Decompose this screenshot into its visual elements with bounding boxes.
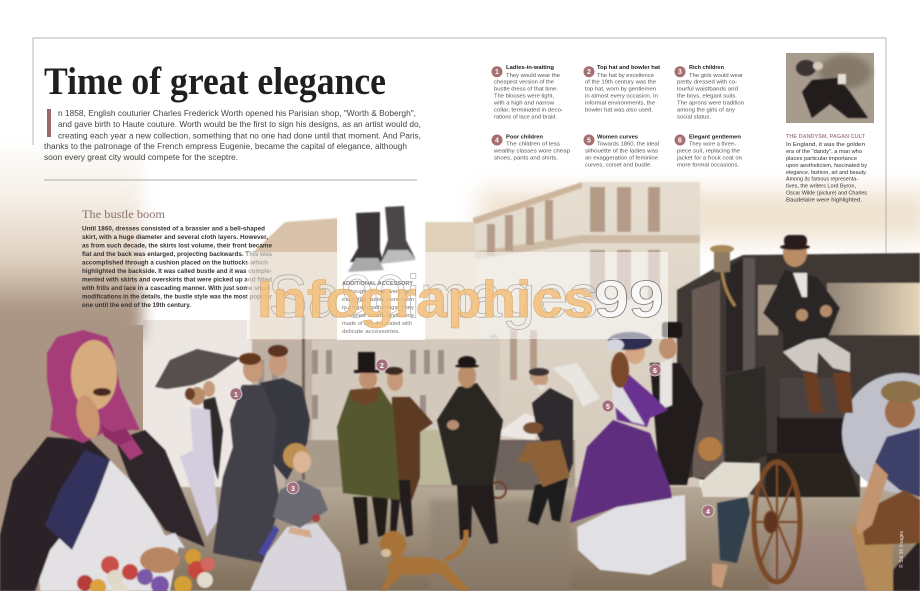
- legend item 3: rich children: The girls would wear: [689, 73, 743, 79]
- sidebar: the dandyism: tives, the writers Lord Byron,: [786, 184, 856, 190]
- legend item 3: rich children: among the girls of any: [677, 107, 735, 113]
- dog: [380, 530, 470, 591]
- legend item 1: ladies-in-waiting: They would wear the: [506, 73, 560, 79]
- legend item 5: women curves: Women curves: [597, 135, 638, 141]
- translucent watermark band: [247, 252, 668, 339]
- number badges on the illustration: 5: [606, 404, 610, 411]
- number badges on the illustration: 6: [653, 368, 657, 375]
- legend item 1: ladies-in-waiting: [492, 65, 563, 121]
- sidebar: the dandyism: Oscar Wilde (picture) and Charles: [786, 190, 867, 196]
- text block: the bustle boom: modifications in the details, the bustle style was the most popular: [82, 294, 273, 300]
- watermark: 99: [594, 271, 664, 329]
- legend item 3: rich children: Rich children: [689, 65, 724, 71]
- text block: the bustle boom: as from such decade, the skirts lost volume, their front became: [82, 244, 273, 250]
- legend item 4: poor children: wealthy classes wore cheap: [493, 148, 570, 154]
- legend item 6: elegant gentlemen: They wore a three-: [689, 141, 736, 147]
- legend item 2: top hat and bowler hat: informal environments, the: [585, 100, 655, 106]
- legend item 3: rich children: lourful waistbands and: [677, 86, 738, 92]
- accessories caption: in elegant gatherings. They: [342, 305, 414, 311]
- legend item 3: rich children: The aprons were tradition: [677, 100, 744, 106]
- legend item 5: women curves: [584, 134, 659, 168]
- lady behind: [260, 345, 310, 480]
- sidebar: the dandyism: In England, it was the golden: [786, 142, 865, 148]
- drop cap: [47, 109, 51, 137]
- running boy in brown jacket: [517, 422, 570, 525]
- text block: the bustle boom: flat and the back was enlarged, projecting backwards. This was: [82, 252, 273, 258]
- carriage window: [827, 283, 920, 335]
- number badges on the illustration: 4: [706, 509, 710, 516]
- copyright credit: © Sol 90 Images: [898, 530, 905, 568]
- legend item 1: ladies-in-waiting: bustle dress of that time.: [494, 86, 558, 92]
- carriage wheel: [754, 462, 800, 582]
- legend item 6: elegant gentlemen: 6: [678, 138, 682, 144]
- text block: the bustle boom: [81, 226, 273, 309]
- legend item 3: rich children: social status.: [677, 115, 711, 121]
- legend item 5: women curves: an exaggeration of feminine: [585, 155, 658, 161]
- carriage lamp: [710, 245, 735, 306]
- watermark: Sa90images: [268, 263, 598, 330]
- accessories caption: made of silk, decorated with: [342, 321, 412, 327]
- boy bending by the wheel: [698, 437, 760, 588]
- carriage body: [677, 253, 920, 497]
- legend item 6: elegant gentlemen: jacket for a frock coat on: [676, 155, 742, 161]
- accessories caption: Although gloves were not: [342, 289, 412, 295]
- legend item 3: rich children: the boys, elegant suits.: [677, 94, 737, 100]
- number badges on the illustration: [230, 359, 714, 517]
- boy with basket: [850, 381, 920, 591]
- sepia photo: Oscar Wilde: [786, 53, 874, 123]
- street: [143, 487, 920, 591]
- light hoop: [842, 373, 920, 493]
- carriage cart and newspaper stand: [490, 413, 540, 498]
- text block: the bustle boom: skirt, with a huge diameter and several cloth layers. However,: [82, 235, 268, 241]
- legend item 4: poor children: shoes, pants and shirts.: [494, 155, 559, 161]
- number badges on the illustration: 2: [380, 363, 384, 370]
- legend item 1: ladies-in-waiting: with a high and narrow: [493, 100, 554, 106]
- legend item 4: poor children: 4: [495, 138, 499, 144]
- text block: the bustle boom: accomplished through a cushion placed on the buttocks which: [82, 260, 268, 266]
- text block: the bustle boom: Until 1860, dresses consisted of a brassier and a bell-shaped: [82, 226, 265, 232]
- legend item 1: ladies-in-waiting: collar, terminated in deco-: [494, 107, 563, 113]
- number badges on the illustration: 1: [234, 392, 238, 399]
- number badges on the illustration: 3: [291, 486, 295, 493]
- intro paragraph: [44, 108, 421, 162]
- legend item 4: poor children: Poor children: [506, 135, 543, 141]
- intro paragraph: creating each year a new collection, something that no one had done until that moment. And Paris,: [58, 130, 421, 140]
- sidebar: the dandyism: THE DANDYSM, PAGAN CULT: [786, 134, 865, 140]
- intro paragraph: n 1858, English couturier Charles Frederick Worth opened his Parisian shop, "Worth & Bobergh",: [58, 108, 416, 118]
- legend item 4: poor children: The children of less: [506, 141, 560, 147]
- lady in purple gown: [570, 332, 686, 575]
- intro paragraph: and gave birth to Haute couture. Worth would be the first to sign his designs, as an artist would do,: [58, 119, 421, 129]
- legend item 4: poor children: [492, 134, 570, 161]
- legend item 2: top hat and bowler hat: top hat, worn by gentlemen: [585, 86, 656, 92]
- sidebar: the dandyism: Among its famous representa-: [786, 176, 858, 182]
- man reading newspaper: [529, 363, 600, 490]
- intro paragraph: soon every great city would compete for the sceptre.: [44, 152, 238, 162]
- watermark: Infographics: [257, 271, 594, 329]
- legend item 2: top hat and bowler hat: 2: [587, 69, 591, 76]
- text block: the bustle boom: mented with skirts and overskirts that were picked up and filled: [82, 278, 272, 284]
- legend item 1: ladies-in-waiting: Ladies-in-waiting: [506, 65, 554, 71]
- legend item 6: elegant gentlemen: [674, 134, 742, 168]
- legend item 5: women curves: 5: [587, 138, 591, 144]
- legend item 1: ladies-in-waiting: 1: [495, 69, 499, 76]
- legend item 5: women curves: Towards 1860, the ideal: [597, 141, 659, 147]
- legend item 2: top hat and bowler hat: Top hat and bowler hat: [597, 65, 660, 71]
- building: right facade: [473, 182, 700, 490]
- legend item 1: ladies-in-waiting: cheapest version of the: [494, 80, 554, 86]
- legend item 2: top hat and bowler hat: in almost every occasion. In: [585, 94, 658, 100]
- legend item 5: women curves: curves, corset and bustle.: [585, 162, 653, 168]
- legend item 2: top hat and bowler hat: bowler hat was also used.: [585, 107, 653, 113]
- intro paragraph: thanks to the patronage of the French empress Eugenie, became the capital of elegance, although: [44, 141, 407, 151]
- accessories caption: [342, 281, 414, 335]
- sidebar: the dandyism: [786, 134, 867, 204]
- flower seller: [0, 330, 215, 591]
- gentleman behind lady: [650, 322, 703, 485]
- legend item 6: elegant gentlemen: piece suit, replacing the: [677, 148, 740, 154]
- frame lines: [33, 38, 886, 253]
- gentleman in brown: [385, 367, 433, 537]
- text block: the bustle boom: highlighted the backside. It was called bustle and it was comple-: [82, 269, 272, 275]
- legend item 3: rich children: [674, 65, 744, 121]
- illustration: carriage with driver: [677, 235, 920, 582]
- legend item 3: rich children: pretty dressed with co-: [677, 80, 737, 86]
- sidebar: the dandyism: places particular importance: [786, 156, 857, 162]
- sidebar: the dandyism: Baudelaire were highlighted.: [786, 198, 862, 204]
- people at left: umbrella couple: [155, 349, 240, 537]
- accessories caption: ADDITIONAL ACCESSORY: [342, 281, 413, 287]
- sidebar: the dandyism: upon aestheticism, fascinated by: [786, 163, 867, 169]
- building: central low facade: [250, 218, 575, 490]
- lady-in-waiting: [213, 353, 280, 563]
- legend item 6: elegant gentlemen: Elegant gentlemen: [689, 135, 741, 141]
- sidebar: the dandyism: elegance, fashion, art and beauty.: [786, 170, 867, 176]
- girl with bouquet: [250, 443, 347, 591]
- driver: [763, 235, 853, 413]
- legend item 2: top hat and bowler hat: [584, 65, 660, 113]
- gentleman in black with bowler hat: [437, 356, 503, 544]
- accessories caption: delicate accessories.: [342, 329, 400, 335]
- text block: the bustle boom: one until the end of the 19th century.: [82, 303, 191, 309]
- legend item 6: elegant gentlemen: more formal occasions.: [677, 162, 740, 168]
- legend item 2: top hat and bowler hat: The hat by excellence: [597, 73, 654, 79]
- panel: accessories: [337, 205, 425, 340]
- flower bouquet: [77, 549, 215, 591]
- gentleman in green coat: [337, 352, 400, 545]
- accessories caption: essential, ladies wore them: [342, 297, 414, 303]
- text block: the bustle boom: with frills and lace in a cascading manner. With just some small: [81, 286, 270, 292]
- heading: the bustle boom: The bustle boom: [82, 207, 166, 221]
- illustration: street figures: [0, 322, 920, 591]
- legend item 1: ladies-in-waiting: The blouses were tight,: [494, 94, 554, 100]
- title: Time of great elegance: [44, 60, 386, 103]
- legend item 1: ladies-in-waiting: rations of lace and braid.: [494, 115, 557, 121]
- icon: pair of gaiters: [348, 206, 416, 272]
- sidebar: the dandyism: era of the "dandy", a man who: [786, 149, 862, 155]
- legend item 3: rich children: 3: [678, 69, 682, 76]
- legend item 5: women curves: silhouette of the ladies was: [585, 148, 658, 154]
- legend item 2: top hat and bowler hat: of the 19th century was the: [585, 80, 656, 86]
- background: painted street scene: [0, 140, 920, 591]
- accessories caption: covered wrists and were: [342, 313, 414, 319]
